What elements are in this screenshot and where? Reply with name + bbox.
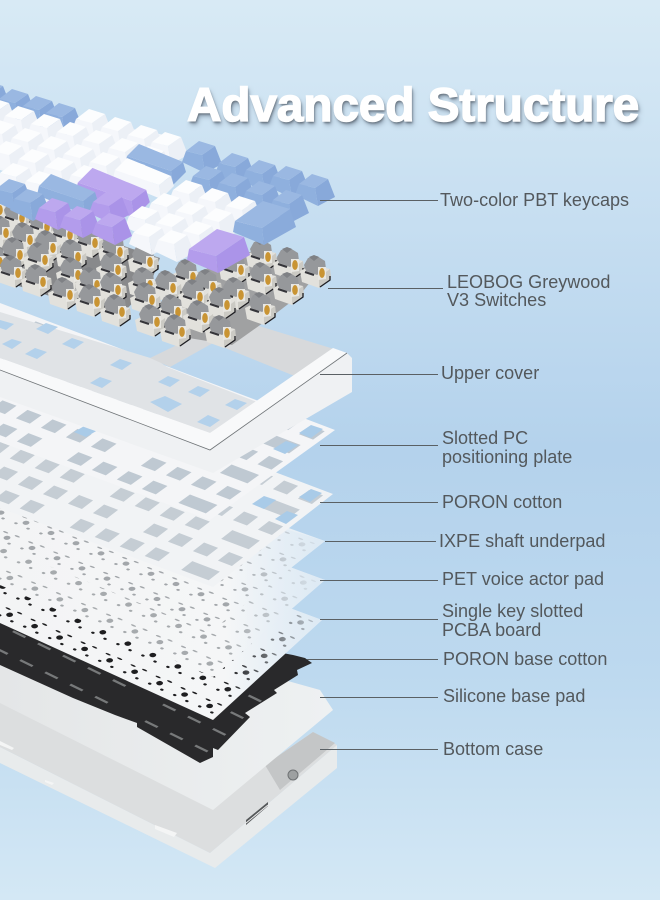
label: Single key slotted PCBA board: PCBA board xyxy=(442,620,541,640)
switches xyxy=(0,192,331,348)
leader lines xyxy=(307,200,443,750)
cover side wall xyxy=(0,353,352,473)
layer: slotted PC positioning plate xyxy=(0,303,335,520)
label: PORON cotton: PORON cotton xyxy=(442,492,562,512)
icon: USB port xyxy=(246,802,268,825)
label: LEOBOG Greywood V3 Switches: LEOBOG Greywood xyxy=(447,272,610,292)
label: Single key slotted PCBA board: Single key slotted xyxy=(442,601,583,621)
label: PORON base cotton: PORON base cotton xyxy=(443,649,607,669)
layer: PET voice actor pad xyxy=(0,446,325,677)
label: Slotted PC positioning plate: Slotted PC xyxy=(442,428,528,448)
layer: single key slotted PCBA board xyxy=(0,477,322,720)
layer: silicone base pad xyxy=(0,600,333,810)
cover back rim band xyxy=(150,318,347,377)
label: Slotted PC positioning plate: positioning plate xyxy=(442,447,572,467)
case tabs xyxy=(0,741,177,837)
keycaps xyxy=(0,81,335,273)
layer: upper cover xyxy=(0,312,352,473)
label: Silicone base pad: Silicone base pad xyxy=(443,686,585,706)
title: Advanced Structure xyxy=(187,79,639,132)
label: PET voice actor pad: PET voice actor pad xyxy=(442,569,604,589)
label: Two-color PBT keycaps: Two-color PBT keycaps xyxy=(440,190,629,210)
cover interior plate xyxy=(0,312,340,433)
icon: selector knob xyxy=(288,770,298,780)
layer: PORON base cotton xyxy=(0,597,312,763)
label: Bottom case: Bottom case xyxy=(443,739,543,759)
layer: bottom case xyxy=(0,700,337,868)
label: Upper cover: Upper cover xyxy=(441,363,539,383)
cover rim xyxy=(0,348,347,450)
cover key cutouts xyxy=(0,320,247,427)
label: IXPE shaft underpad: IXPE shaft underpad xyxy=(439,531,605,551)
layer: PORON cotton xyxy=(0,368,333,587)
label: LEOBOG Greywood V3 Switches: V3 Switches xyxy=(447,290,546,310)
layer: IXPE shaft underpad xyxy=(0,414,325,632)
